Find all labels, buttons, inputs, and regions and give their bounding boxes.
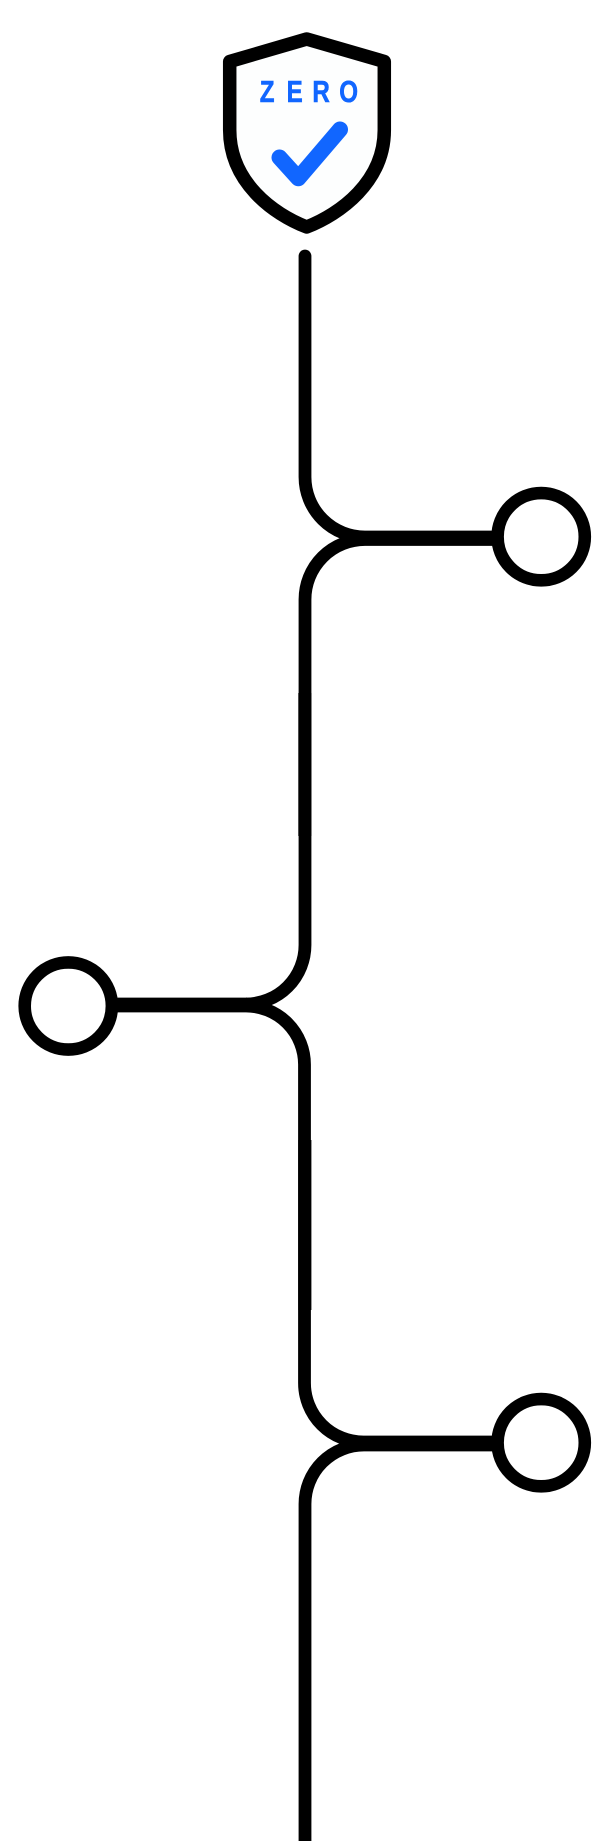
node: left circle <box>25 962 112 1050</box>
icon: zero shield <box>230 39 384 227</box>
trunk offset lower <box>298 1140 311 1310</box>
first trunk segment and right branch <box>305 256 495 537</box>
node: lower right circle <box>498 1399 585 1486</box>
shield label: ZERO: ZERO <box>260 74 358 109</box>
node: upper right circle <box>498 493 585 580</box>
left branch lower stroke and third trunk segment <box>115 1006 495 1442</box>
shield outline <box>230 39 384 227</box>
left branch upper stroke <box>115 998 247 1010</box>
trunk offset upper <box>298 693 311 836</box>
lower right branch and final trunk segment <box>305 1445 495 1841</box>
timeline connector lines <box>115 256 495 1841</box>
second trunk segment and first right branch <box>246 540 495 1004</box>
icon: check mark <box>280 130 340 178</box>
